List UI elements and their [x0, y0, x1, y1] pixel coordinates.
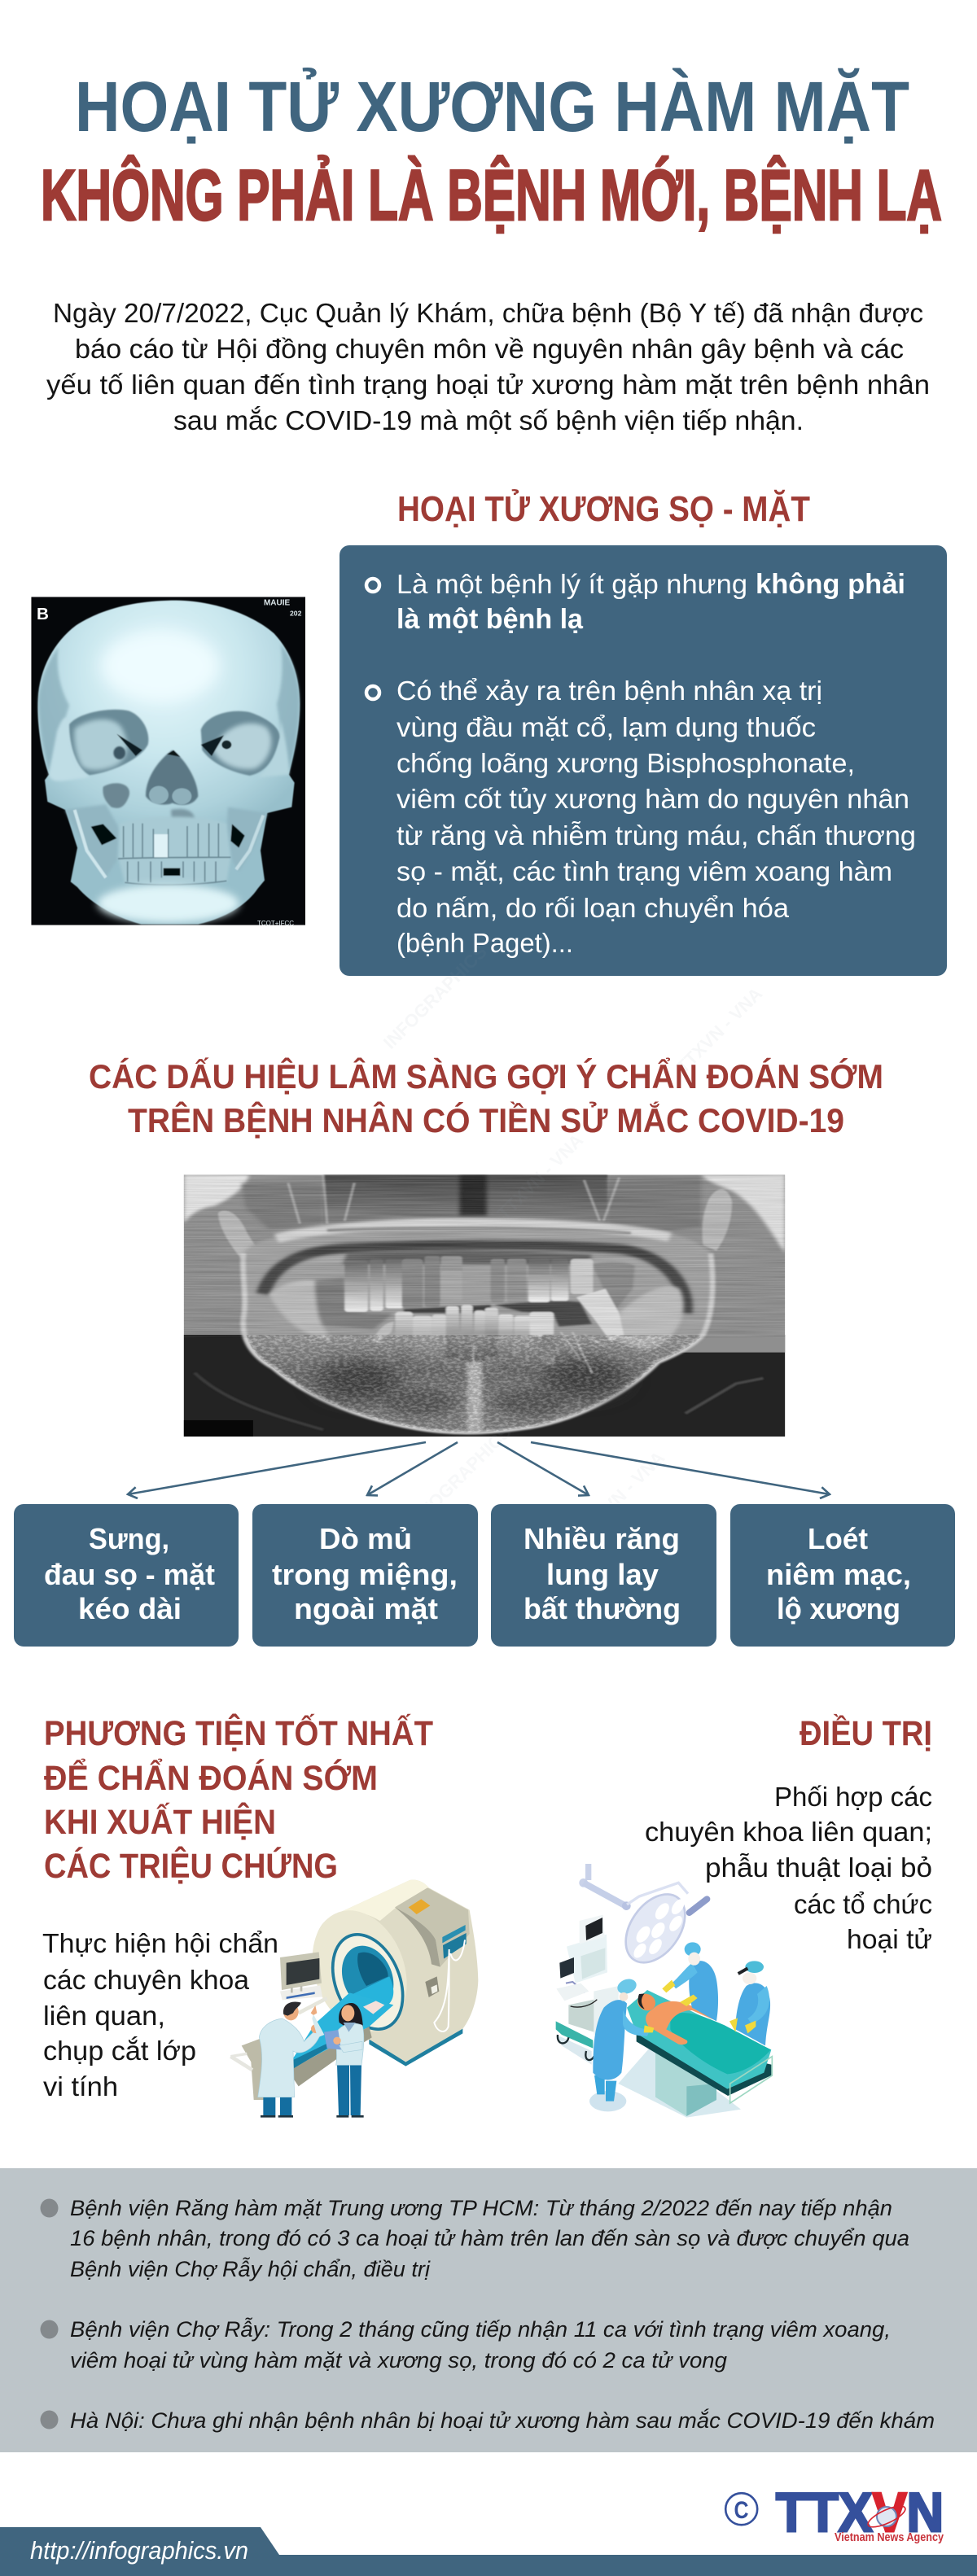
illustration: CT scanner and doctors [230, 1880, 478, 2118]
tilted molar [576, 1288, 624, 1341]
panoramic dental x-ray [184, 1174, 785, 1437]
logo: TTXVN: TTXVN [776, 2482, 944, 2543]
sign box: pus: Dò mủ [319, 1522, 412, 1555]
diagnostic text: chụp cắt lớp [43, 2036, 196, 2066]
arrow: to loose teeth box [497, 1442, 589, 1495]
sign box: swelling: kéo dài [78, 1592, 182, 1625]
sign box: pus [252, 1504, 478, 1647]
report: Hanoi: Hà Nội: Chưa ghi nhận bệnh nhân bị hoại tử xương hàm sau mắc COVID-19 đến khám [70, 2408, 935, 2433]
report: Cho Ray hospital: viêm hoại tử vùng hàm mặt và xương sọ, trong đó có 2 ca tử vong [70, 2348, 727, 2373]
edentulous cavities [315, 1278, 393, 1329]
watermarks: TTXVN - VNA [493, 1130, 587, 1224]
watermarks: TTXVN - VNA [575, 1447, 668, 1542]
sign box: ulcer [730, 1504, 955, 1647]
report: Odonto hospital: Bệnh viện Răng hàm mặt Trung ương TP HCM: Từ tháng 2/2022 đến nay tiếp nhận [70, 2196, 892, 2220]
teal base [369, 2028, 462, 2066]
watermarks: TTXVN - VNA [673, 983, 766, 1078]
skull CT image: 202 [290, 610, 302, 618]
base column [655, 2047, 716, 2116]
report: Odonto hospital: Bệnh viện Chợ Rẫy hội chẩn, điều trị [70, 2257, 431, 2281]
treatment text: chuyên khoa liên quan; [645, 1817, 932, 1847]
left surgeon [593, 1976, 654, 2101]
watermarks [379, 942, 766, 1542]
bullet 2: vùng đầu mặt cổ, lạm dụng thuốc [396, 712, 816, 742]
intro text: sau mắc COVID-19 mà một số bệnh viện tiếp nhận. [173, 405, 804, 435]
bullet 2: do nấm, do rối loạn chuyển hóa [396, 893, 790, 923]
sign box: swelling: đau sọ - mặt [44, 1558, 215, 1591]
treatment text: Phối hợp các [774, 1782, 932, 1812]
sign box: swelling [14, 1504, 239, 1647]
intro text [46, 298, 930, 435]
sign box: ulcer: niêm mạc, [766, 1558, 911, 1591]
title [41, 68, 942, 235]
bullet 2: (bệnh Paget)... [396, 928, 573, 958]
center surgeon [662, 1942, 718, 2021]
bright palate band [277, 1222, 670, 1239]
anesthesia machine [556, 1915, 619, 2060]
diagnostic text: Thực hiện hội chẩn [42, 1928, 278, 1958]
sign box: ulcer: Loét [808, 1522, 868, 1555]
heading: treatment: ĐIỀU TRỊ [800, 1714, 932, 1753]
arrow: to pus box [367, 1442, 458, 1495]
man doctor [258, 2001, 324, 2118]
heading: best diagnostic method: CÁC TRIỆU CHỨNG [44, 1846, 338, 1886]
left orbit [69, 710, 148, 775]
operating table [637, 2033, 771, 2096]
heading: necrosis of skull and face: HOẠI TỬ XƯƠNG SỌ - MẶT [397, 488, 810, 529]
scanner body [315, 1880, 478, 2062]
watermarks: INFOGRAPHICS [379, 942, 491, 1053]
intro text: báo cáo từ Hội đồng chuyên môn về nguyên nhân gây bệnh và các [75, 334, 904, 364]
mandible [243, 1221, 712, 1432]
chin highlight [98, 885, 239, 922]
bullet 1 [366, 569, 905, 635]
treatment text: phẫu thuật loại bỏ [705, 1852, 932, 1883]
report: Cho Ray hospital: Bệnh viện Chợ Rẫy: Trong 2 tháng cũng tiếp nhận 11 ca với tình trạng viêm xoang, [70, 2317, 891, 2342]
skull CT image [31, 597, 305, 927]
dark arc behind upper teeth [263, 1245, 686, 1313]
skull CT image: B [37, 605, 49, 623]
heading: best diagnostic method: PHƯƠNG TIỆN TỐT NHẤT [44, 1713, 433, 1753]
lamp arm [579, 1864, 707, 1974]
patient [634, 1991, 714, 2045]
intro text: yếu tố liên quan đến tình trạng hoại tử xương hàm mặt trên bệnh nhân [46, 370, 930, 400]
heading: clinical signs [89, 1056, 883, 1139]
sign box: ulcer: lộ xương [777, 1592, 900, 1625]
nasal cavity [146, 750, 198, 805]
floor [618, 2043, 741, 2118]
report: Odonto hospital: 16 bệnh nhân, trong đó có 3 ca hoại tử hàm trên lan đến sàn sọ và được chuyển qua [70, 2226, 909, 2250]
treatment text: các tổ chức [794, 1889, 932, 1919]
sign box: swelling: Sưng, [89, 1522, 169, 1555]
footer url: http://infographics.vn [30, 2536, 248, 2565]
footer bar [0, 2527, 977, 2576]
bullet 2: Có thể xảy ra trên bệnh nhân xạ trị [396, 676, 822, 706]
heading: clinical signs: CÁC DẤU HIỆU LÂM SÀNG GỢI Ý CHẨN ĐOÁN SỚM [89, 1056, 883, 1096]
diagnostic text: liên quan, [43, 2001, 165, 2031]
bullet 1: là một bệnh lạ [396, 604, 584, 635]
front ring [296, 1897, 423, 2045]
heading: best diagnostic method: KHI XUẤT HIỆN [44, 1802, 276, 1842]
treatment text: hoại tử [847, 1924, 932, 1954]
bullet 2: sọ - mặt, các tình trạng viêm xoang hàm [396, 856, 892, 886]
gold button [409, 1899, 430, 1914]
diagnostic text: vi tính [43, 2071, 118, 2101]
intro text: Ngày 20/7/2022, Cục Quản lý Khám, chữa bệnh (Bộ Y tế) đã nhận được [53, 298, 923, 328]
heading: best diagnostic method: ĐỂ CHẨN ĐOÁN SỚM [44, 1758, 378, 1798]
report: Cho Ray hospital [41, 2317, 891, 2373]
report: Odonto hospital [41, 2196, 909, 2281]
bullet 2 [366, 676, 916, 958]
console [280, 1952, 322, 1990]
bullet 2: từ răng và nhiễm trùng máu, chấn thương [396, 820, 916, 851]
sign box: loose teeth: Nhiều răng [524, 1522, 680, 1555]
arrow: to ulcer box [531, 1442, 830, 1494]
lower face and teeth [118, 817, 230, 883]
socket [425, 1976, 439, 1997]
sign box: loose teeth [491, 1504, 716, 1647]
lower teeth [372, 1305, 603, 1373]
woman doctor [324, 2003, 364, 2118]
upper teeth [344, 1256, 593, 1312]
panel: hospital reports [0, 2168, 977, 2452]
right surgeon [729, 1961, 770, 2045]
diagnostic text [42, 1928, 278, 2101]
arrow: to swelling box [128, 1442, 426, 1494]
control strips [442, 1925, 466, 1943]
heading: clinical signs: TRÊN BỆNH NHÂN CÓ TIỀN SỬ MẮC COVID-19 [128, 1100, 844, 1139]
jaw gaps [91, 824, 116, 845]
bullet 2: chống loãng xương Bisphosphonate, [396, 748, 855, 778]
left cheek lesion [103, 783, 129, 808]
bed foot [242, 2037, 266, 2100]
jaw bone lighter sides [269, 1279, 331, 1340]
skull CT image: MAUIE [264, 598, 291, 607]
sign box: loose teeth: bất thường [524, 1592, 681, 1625]
bed [291, 1992, 393, 2069]
right orbit [201, 711, 279, 776]
illustration: surgery [556, 1864, 772, 2118]
sign box: pus: trong miệng, [272, 1558, 458, 1591]
sign box: loose teeth: lung lay [546, 1558, 659, 1591]
bullet 1: Là một bệnh lý ít gặp nhưng [396, 569, 747, 599]
bullet 2: viêm cốt tủy xương hàm do nguyên nhân [396, 784, 909, 814]
lower jaw dark trabecular areas [315, 1359, 401, 1402]
logo: TTXVN: Vietnam News Agency [835, 2530, 944, 2544]
film streaks and bone grain [184, 1174, 785, 1337]
watermarks: INFOGRAPHICS [404, 1422, 515, 1533]
treatment text [645, 1782, 932, 1954]
cable [434, 1940, 465, 2031]
logo: TTXVN: C [734, 2497, 749, 2524]
sign box: pus: ngoài mặt [294, 1592, 438, 1625]
panel: description [340, 545, 947, 976]
pillow [363, 2001, 384, 2014]
bullet 1: không phải [756, 569, 905, 600]
diagnostic text: các chuyên khoa [43, 1965, 250, 1995]
skull CT image: TCOT+IFCC [257, 920, 294, 927]
heading: best diagnostic method [44, 1713, 433, 1886]
